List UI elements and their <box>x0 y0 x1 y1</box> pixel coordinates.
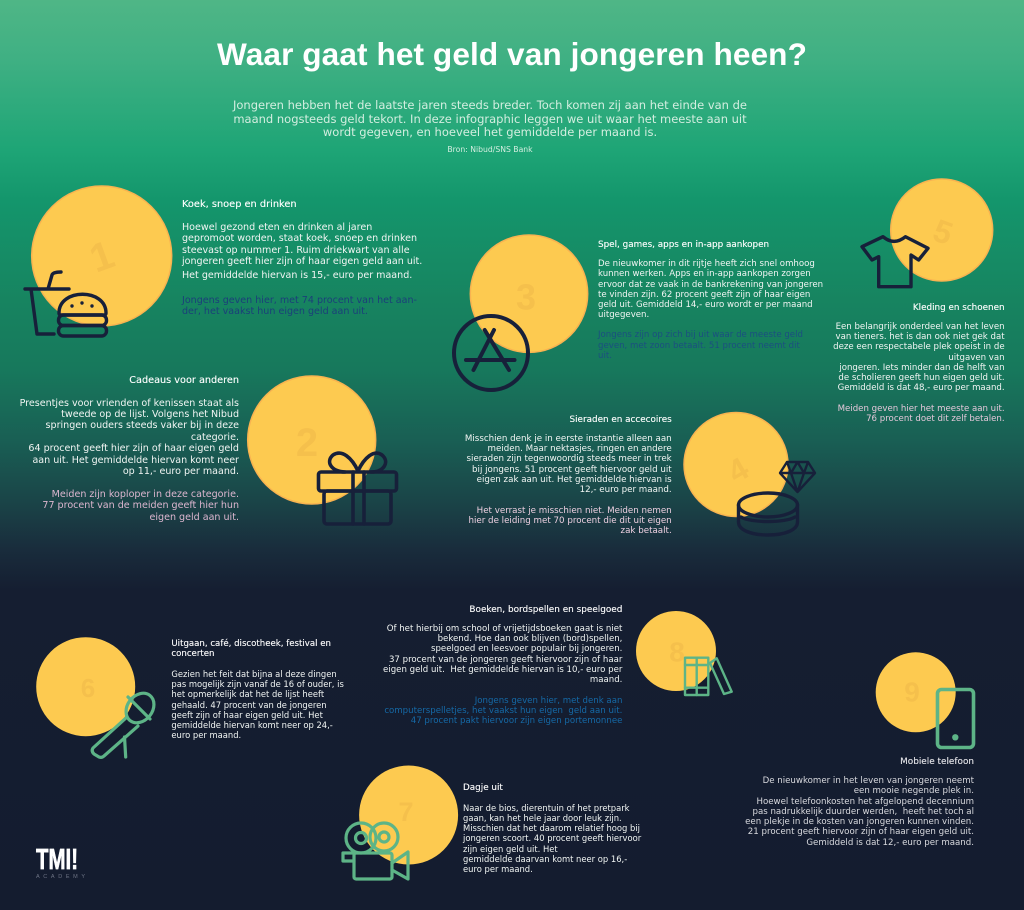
intro text: Jongeren hebben het de laatste jaren steeds breder. Toch komen zij aan het einde van de <box>233 98 747 112</box>
source: Bron: Nibud/SNS Bank <box>447 145 533 154</box>
body text: Gemiddeld is dat 12,- euro per maand. <box>806 838 974 848</box>
body text: steevast op nummer 1. Ruim driekwart van alle <box>182 245 410 256</box>
body text: De nieuwkomer in het leven van jongeren neemt <box>763 776 974 786</box>
body text: geeft zijn of haar eigen geld uit. Het <box>171 710 323 720</box>
panel: mobiele telefoon <box>745 652 976 848</box>
body text: gemiddelde daarvan komt neer op 16,- <box>463 854 627 864</box>
icon: coin 7 with film camera <box>341 766 458 881</box>
callout: girls: hier de leiding met 70 procent die dit uit eigen <box>468 516 672 526</box>
body text: tweede op de lijst. Volgens het Nibud <box>61 409 239 420</box>
body text: een plekje in de kosten van jongeren kunnen vinden. <box>745 817 974 827</box>
body text <box>833 322 1005 393</box>
body text: geld uit. Gemiddeld 14,- euro wordt er per maand <box>598 300 813 310</box>
icon: coin 4 with diamond and ring: 4 <box>721 450 755 490</box>
body text: het opmerkelijk dat het de lijst heeft <box>171 689 324 699</box>
body text: 21 procent geeft hiervoor zijn of haar eigen geld uit. <box>748 827 974 837</box>
body text: jongeren. Iets minder dan de helft van <box>839 363 1005 373</box>
heading: Kleding en schoenen <box>913 303 1005 313</box>
icon: coin 3 with app store: 3 <box>516 276 536 318</box>
body text: kunnen werken. Apps en in-app aankopen zorgen <box>598 269 811 279</box>
icon: coin 9 with phone <box>876 652 976 750</box>
body text: jongeren geeft hier zijn of haar eigen geld aan uit. <box>182 256 422 267</box>
body text: euro per maand. <box>463 864 533 874</box>
body text <box>171 669 344 740</box>
callout: girls: zak betaalt. <box>621 526 672 536</box>
body text: categorie. <box>191 432 239 443</box>
body text: euro per maand. <box>171 730 241 740</box>
body text: zijn eigen geld uit. Het <box>463 844 558 854</box>
heading: Koek, snoep en drinken <box>182 199 297 210</box>
body text <box>182 222 422 267</box>
callout: girls: 77 procent van de meiden geeft hier hun <box>42 500 239 511</box>
body text: een mooie negende plek in. <box>854 786 974 796</box>
heading: Cadeaus voor anderen <box>129 375 239 386</box>
body text: 64 procent geeft hier zijn of haar eigen geld <box>28 443 239 454</box>
icon: coin 3 with app store <box>452 234 588 392</box>
body text <box>598 259 823 320</box>
callout: boys: Jongens geven hier, met 74 procent van het aan- <box>182 295 417 306</box>
body text: Hoewel telefoonkosten het afgelopend decennium <box>756 797 974 807</box>
panel: cadeaus voor anderen <box>20 375 398 526</box>
body text: uitgegeven. <box>598 310 649 320</box>
icon: coin 9 with phone: 9 <box>904 676 920 708</box>
body text: Presentjes voor vrienden of kenissen staat als <box>20 398 239 409</box>
body text: Gezien het feit dat bijna al deze dingen <box>171 669 337 679</box>
intro text: wordt gegeven, en hoeveel het gemiddelde per maand is. <box>323 125 657 139</box>
body text: Gemiddeld is dat 48,- euro per maand. <box>838 383 1005 393</box>
body text <box>20 398 239 477</box>
callout: girls: Het verrast je misschien niet. Meiden nemen <box>477 506 672 516</box>
icon: coin 1 with drink and burger: 1 <box>84 233 120 281</box>
body text: springen ouders steeds vaker bij in deze <box>46 420 239 431</box>
body text: Naar de bios, dierentuin of het pretpark <box>463 803 630 813</box>
callout: boys <box>384 696 622 726</box>
callout: boys: Jongens zijn op zich bij uit waar de meeste geld <box>598 330 803 340</box>
body text: gemiddelde hiervan komt neer op 24,- <box>171 720 333 730</box>
heading: Dagje uit <box>463 783 503 793</box>
icon: coin 1 with drink and burger <box>23 185 172 338</box>
icon: coin 6 with microphone <box>36 637 156 759</box>
icon: coin 6 with microphone: 6 <box>81 673 95 703</box>
callout: boys: geven, met zoon betaalt. 51 procent neemt dit <box>598 341 800 351</box>
callout: girls <box>468 506 672 536</box>
callout: girls: Meiden geven hier het meeste aan uit. <box>838 404 1005 414</box>
icon: coin 8 with books: 8 <box>669 636 685 668</box>
body text: deze een respectabele plek opeist in de <box>833 342 1005 352</box>
panel: sieraden en accecoires <box>465 412 816 537</box>
heading: Spel, games, apps en in-app aankopen <box>598 240 769 250</box>
body text: maand. <box>590 675 622 685</box>
heading: Uitgaan, café, discotheek, festival en <box>171 639 331 649</box>
panel: koek, snoep en drinken <box>23 185 422 338</box>
callout: boys: der, het vaakst hun eigen geld aan uit. <box>182 306 368 317</box>
heading <box>171 638 331 659</box>
icon: coin 5 with t-shirt <box>860 178 994 288</box>
heading: concerten <box>171 649 214 659</box>
intro text <box>232 98 747 139</box>
panel: boeken, bordspellen en speelgoed <box>383 605 733 726</box>
icon: coin 5 with t-shirt: 5 <box>928 212 958 252</box>
callout: girls: eigen geld aan uit. <box>150 512 239 523</box>
body text <box>465 434 672 495</box>
callout: boys: Jongens geven hier, met denk aan <box>475 696 622 706</box>
body text: ervoor dat ze vaak in de bankrekening van jongeren <box>598 280 823 290</box>
callout: boys <box>598 330 803 361</box>
heading: Boeken, bordspellen en speelgoed <box>469 605 622 615</box>
title: Waar gaat het geld van jongeren heen? <box>217 36 807 72</box>
icon: coin 4 with diamond and ring <box>683 412 816 537</box>
body text: De nieuwkomer in dit rijtje heeft zich snel omhoog <box>598 259 815 269</box>
logo: TMI Academy: ACADEMY <box>36 874 85 880</box>
body text: meiden. Maar nektasjes, ringen en andere <box>488 444 672 454</box>
panel: uitgaan <box>36 637 344 759</box>
callout: girls <box>838 404 1005 424</box>
body text: bekend. Hoe dan ook blijven (bord)spellen, <box>438 634 622 644</box>
callout: girls: 76 procent doet dit zelf betalen. <box>866 414 1005 424</box>
callout: boys: computerspelletjes, het vaakst hun eigen geld aan uit. <box>384 706 622 716</box>
heading: Sieraden en accecoires <box>570 415 672 425</box>
intro text: maand nogsteeds geld tekort. In deze infographic leggen we uit waar het meeste aan uit <box>233 112 747 126</box>
body text: Of het hierbij om school of vrijetijdsboeken gaat is niet <box>387 624 622 634</box>
callout: girls: Meiden zijn koploper in deze categorie. <box>52 489 239 500</box>
body text: speelgoed en leesvoer populair bij jongeren. <box>431 644 622 654</box>
body text: Misschien denk je in eerste instantie alleen aan <box>465 434 672 444</box>
icon: coin 2 with gift: 2 <box>296 421 318 465</box>
body text: eigen geld uit. Het gemiddelde hiervan is 10,- euro per <box>383 665 622 675</box>
callout: boys: uit. <box>598 351 612 361</box>
body text: te vinden zijn. 62 procent geeft zijn of haar eigen <box>598 290 810 300</box>
body text: eigen zak aan uit. Het gemiddelde hiervan is <box>477 475 672 485</box>
body text: Hoewel gezond eten en drinken al jaren <box>182 222 372 233</box>
body text: aan uit. Het gemiddelde hiervan komt neer <box>32 455 239 466</box>
average amount: Het gemiddelde hiervan is 15,- euro per maand. <box>182 270 412 281</box>
body text <box>383 624 622 685</box>
panel: dagje uit <box>341 766 642 881</box>
body text <box>745 776 974 848</box>
body text: 37 procent van de jongeren geeft hiervoor zijn of haar <box>389 655 622 665</box>
body text: bij jongens. 51 procent geeft hiervoor geld uit <box>472 465 672 475</box>
body text: op 11,- euro per maand. <box>123 466 239 477</box>
body text: 12,- euro per maand. <box>580 485 672 495</box>
icon: coin 8 with books <box>636 611 733 696</box>
callout: girls <box>42 489 239 523</box>
callout: boys: 47 procent pakt hiervoor zijn eigen portemonnee <box>411 716 622 726</box>
body text: pas mogelijk zijn vanaf de 16 of ouder, is <box>171 679 344 689</box>
body text: sieraden zijn tegenwoordig steeds meer in trek <box>466 454 672 464</box>
panel: spel, games, apps <box>452 234 823 392</box>
body text: pas nadrukkelijk duurder werden, heeft het toch al <box>752 807 974 817</box>
panel: kleding en schoenen <box>833 178 1005 424</box>
callout: boys <box>182 295 417 317</box>
body text: uitgaven van <box>948 353 1005 363</box>
body text <box>462 803 642 874</box>
body text: gepromoot worden, staat koek, snoep en drinken <box>182 233 417 244</box>
body text: gaan, kan het hele jaar door leuk zijn. <box>463 813 622 823</box>
body text: Een belangrijk onderdeel van het leven <box>836 322 1005 332</box>
icon: coin 7 with film camera: 7 <box>398 797 414 827</box>
body text: van tieners. het is dan ook niet gek dat <box>836 332 1005 342</box>
body text: gehaald. 47 procent van de jongeren <box>171 700 327 710</box>
heading: Mobiele telefoon <box>900 757 974 767</box>
body text: jongeren scoort. 40 procent geeft hiervoor <box>463 833 641 843</box>
icon: coin 2 with gift <box>246 375 398 526</box>
body text: Misschien dat het daarom relatief hoog bij <box>463 823 640 833</box>
body text: de scholieren geeft hun eigen geld uit. <box>838 373 1005 383</box>
